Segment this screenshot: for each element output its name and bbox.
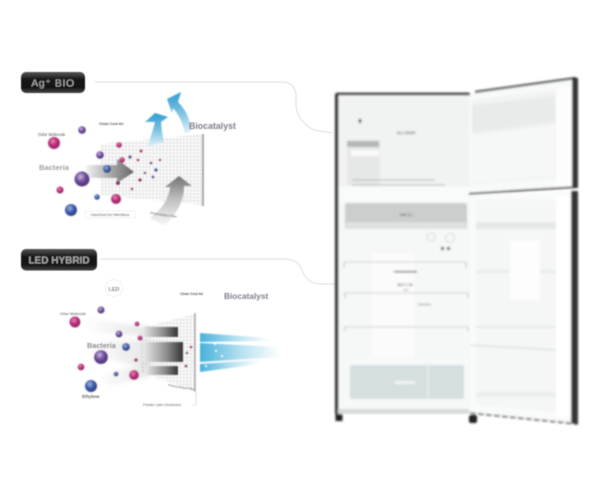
diagram: Ag+ BIO filter: [48, 92, 203, 226]
LED badge: [106, 280, 122, 296]
Ag+ BIO diagram labels: Biocatalyst: [189, 121, 236, 131]
divider: [339, 187, 469, 202]
vegetable crisper: [344, 357, 468, 409]
white-grey air streams: [80, 318, 150, 386]
LED HYBRID diagram labels: [60, 280, 269, 407]
fridge interior: [344, 253, 468, 403]
blue arrows rising: [145, 92, 191, 147]
particles: [48, 126, 161, 216]
cabinet frame: [335, 94, 470, 421]
LED HYBRID diagram labels: Ethylene: [82, 394, 100, 399]
label: LED HYBRID: LED HYBRID: [28, 256, 90, 266]
particles: [70, 306, 192, 392]
Ag+ BIO diagram labels: Bacteria: [39, 163, 70, 172]
mesh filter panel: [101, 134, 203, 206]
LED HYBRID diagram labels: Photocatalyst Filter: [168, 383, 196, 392]
fridge interior: A T: [404, 288, 409, 292]
Ag+ BIO diagram labels: Odor Molecule: [38, 132, 66, 137]
fridge top flap shelf: [345, 203, 467, 229]
LED HYBRID diagram labels: Clean Cool Air: [180, 292, 204, 296]
lower door: [470, 191, 578, 424]
label: Ag+ BIO: Ag⁺ BIO: [31, 78, 75, 90]
diagram: LED HYBRID filter: [70, 306, 280, 392]
connector line: Ag+ BIO to fridge: [95, 82, 332, 133]
dark filter bars: [142, 327, 183, 375]
LED HYBRID diagram labels: Biocatalyst: [224, 291, 269, 301]
upper door: [466, 78, 578, 194]
Ag+ BIO diagram labels: Clean Cool Air: [99, 122, 124, 126]
fridge interior: HI-Z 'L W: [398, 283, 413, 287]
grey arrow right: [86, 159, 134, 183]
refrigerator: [335, 78, 578, 424]
freezer compartment: [339, 98, 469, 186]
Ag+ BIO diagram labels: Odor/Dust Ext Filter/Biocs: [90, 213, 130, 217]
LED HYBRID diagram labels: Powder Latex Deodorizer: [143, 403, 182, 407]
blue clean-air beams: [200, 333, 280, 372]
label: LED HYBRID: [21, 249, 97, 270]
Ag+ BIO diagram labels: [38, 121, 236, 219]
label: Ag+ BIO: [21, 72, 85, 93]
door foot: [469, 415, 477, 423]
control dials: [427, 233, 454, 250]
mesh filter panel: [140, 313, 195, 392]
LED HYBRID diagram labels: Odor Molecule: [60, 311, 87, 316]
freezer compartment: ALL-DOOR: [397, 131, 416, 135]
Ag+ BIO diagram labels: Photocatalyst Filter: [150, 211, 178, 219]
fridge top flap shelf: FAP 3.1: [400, 213, 412, 217]
connector line: LED HYBRID to fridge: [100, 259, 337, 284]
cabinet interior: [335, 94, 471, 414]
LED HYBRID diagram labels: Bacteria: [87, 341, 117, 350]
LED badge: LED: [108, 287, 120, 293]
grey arrow up: [150, 176, 192, 226]
